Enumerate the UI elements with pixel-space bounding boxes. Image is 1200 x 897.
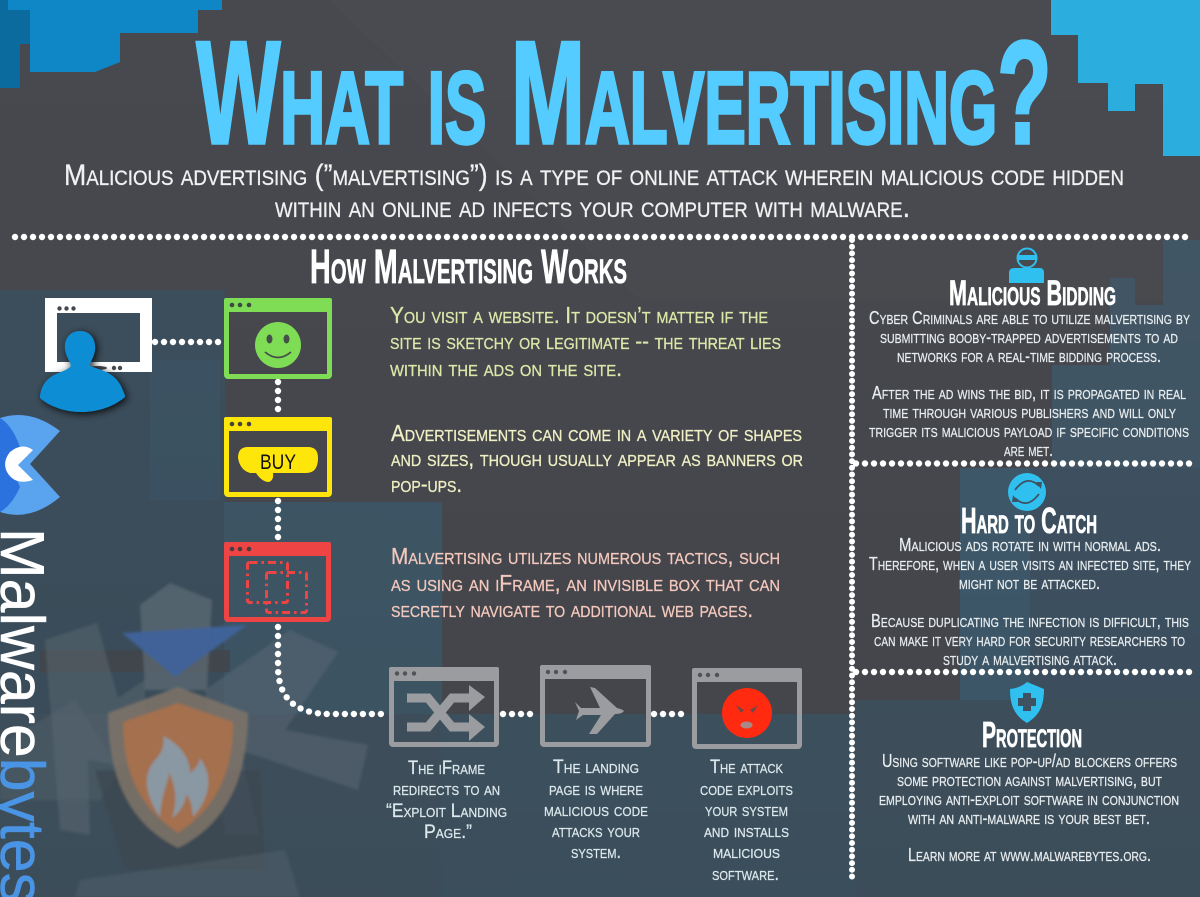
- icon: yellow browser window with buy bubble: [224, 417, 332, 494]
- decoration: top left blue blocks: [0, 0, 222, 88]
- heading: Protection: [982, 714, 1082, 755]
- step text: advertisements: [391, 420, 803, 497]
- heading: how malvertising works: How Malvertising Works: [310, 241, 627, 294]
- icon: green browser window with smiley: [224, 298, 332, 376]
- icon: grey window with plane: [540, 665, 651, 744]
- panel: hard to catch: might not be attacked.: [959, 573, 1100, 593]
- subtitle: [64, 159, 1124, 224]
- caption: attack code: and installs: [704, 821, 789, 842]
- caption: landing page: attacks your: [552, 821, 640, 842]
- subtitle: within an online ad infects your computer with malware.: [275, 191, 910, 224]
- caption: iframe: The iFrame: [408, 758, 485, 779]
- icon: grey window with angry face: [692, 668, 802, 746]
- caption: attack code: [700, 757, 793, 885]
- panel: hard to catch: study a malvertising attack.: [943, 649, 1117, 669]
- caption: iframe: [386, 758, 507, 843]
- step text: tactics: secretly navigate to additional web pages.: [391, 596, 753, 622]
- panel: malicious bidding: are met.: [1004, 440, 1053, 460]
- caption: attack code: The attack: [710, 757, 783, 778]
- step text: advertisements: pop-ups.: [391, 471, 462, 497]
- panel: hard to catch: [869, 500, 1191, 669]
- icon: masked hacker: [1009, 248, 1044, 283]
- caption: landing page: The landing: [553, 757, 639, 778]
- caption: landing page: [544, 757, 648, 863]
- caption: attack code: your system: [705, 800, 788, 821]
- icon: grey window with shuffle arrows: [389, 667, 499, 744]
- panel: protection: with an anti-malware is your best bet.: [908, 808, 1150, 828]
- icon: shield with cross: [1010, 682, 1044, 723]
- icon: red browser window with iframes: [224, 542, 331, 620]
- icon: yellow browser window with buy bubble: BUY: [260, 451, 296, 474]
- dotted dividers: [15, 237, 1190, 881]
- caption: iframe: Page.”: [424, 822, 472, 843]
- step text: tactics: [391, 543, 780, 622]
- caption: attack code: code exploits: [700, 779, 793, 800]
- faded emblem: [0, 583, 368, 897]
- step text: visit a website: site is sketchy or legitimate -- the threat lies: [390, 328, 781, 354]
- caption: landing page: malicious code: [544, 800, 648, 821]
- caption: iframe: redirects to an: [393, 779, 500, 800]
- step text: visit a website: within the ads on the site.: [390, 355, 622, 381]
- caption: attack code: malicious: [713, 842, 780, 863]
- decoration: top right blue blocks: [1051, 0, 1200, 156]
- caption: attack code: software.: [712, 864, 779, 885]
- heading: Hard to Catch: [961, 500, 1097, 541]
- caption: landing page: page is where: [549, 779, 643, 800]
- step text: advertisements: and sizes, though usually appear as banners or: [391, 445, 803, 471]
- panel: protection: [879, 714, 1179, 865]
- caption: iframe: “Exploit Landing: [386, 801, 507, 822]
- caption: landing page: system.: [571, 842, 621, 863]
- icon: rotating circle: [1008, 473, 1046, 511]
- flow connector dots: [155, 342, 690, 714]
- logo: malwarebytes mark: [0, 415, 60, 515]
- step text: tactics: Malvertising utilizes numerous tactics, such: [391, 543, 780, 569]
- icon: user at monitor: [40, 298, 152, 412]
- panel: malicious bidding: [869, 274, 1190, 460]
- step text: tactics: as using an iFrame, an invisible box that can: [391, 570, 780, 596]
- step text: visit a website: [390, 302, 781, 381]
- step text: visit a website: You visit a website. It doesn’t matter if the: [390, 302, 768, 328]
- step text: advertisements: Advertisements can come in a variety of shapes: [391, 420, 802, 446]
